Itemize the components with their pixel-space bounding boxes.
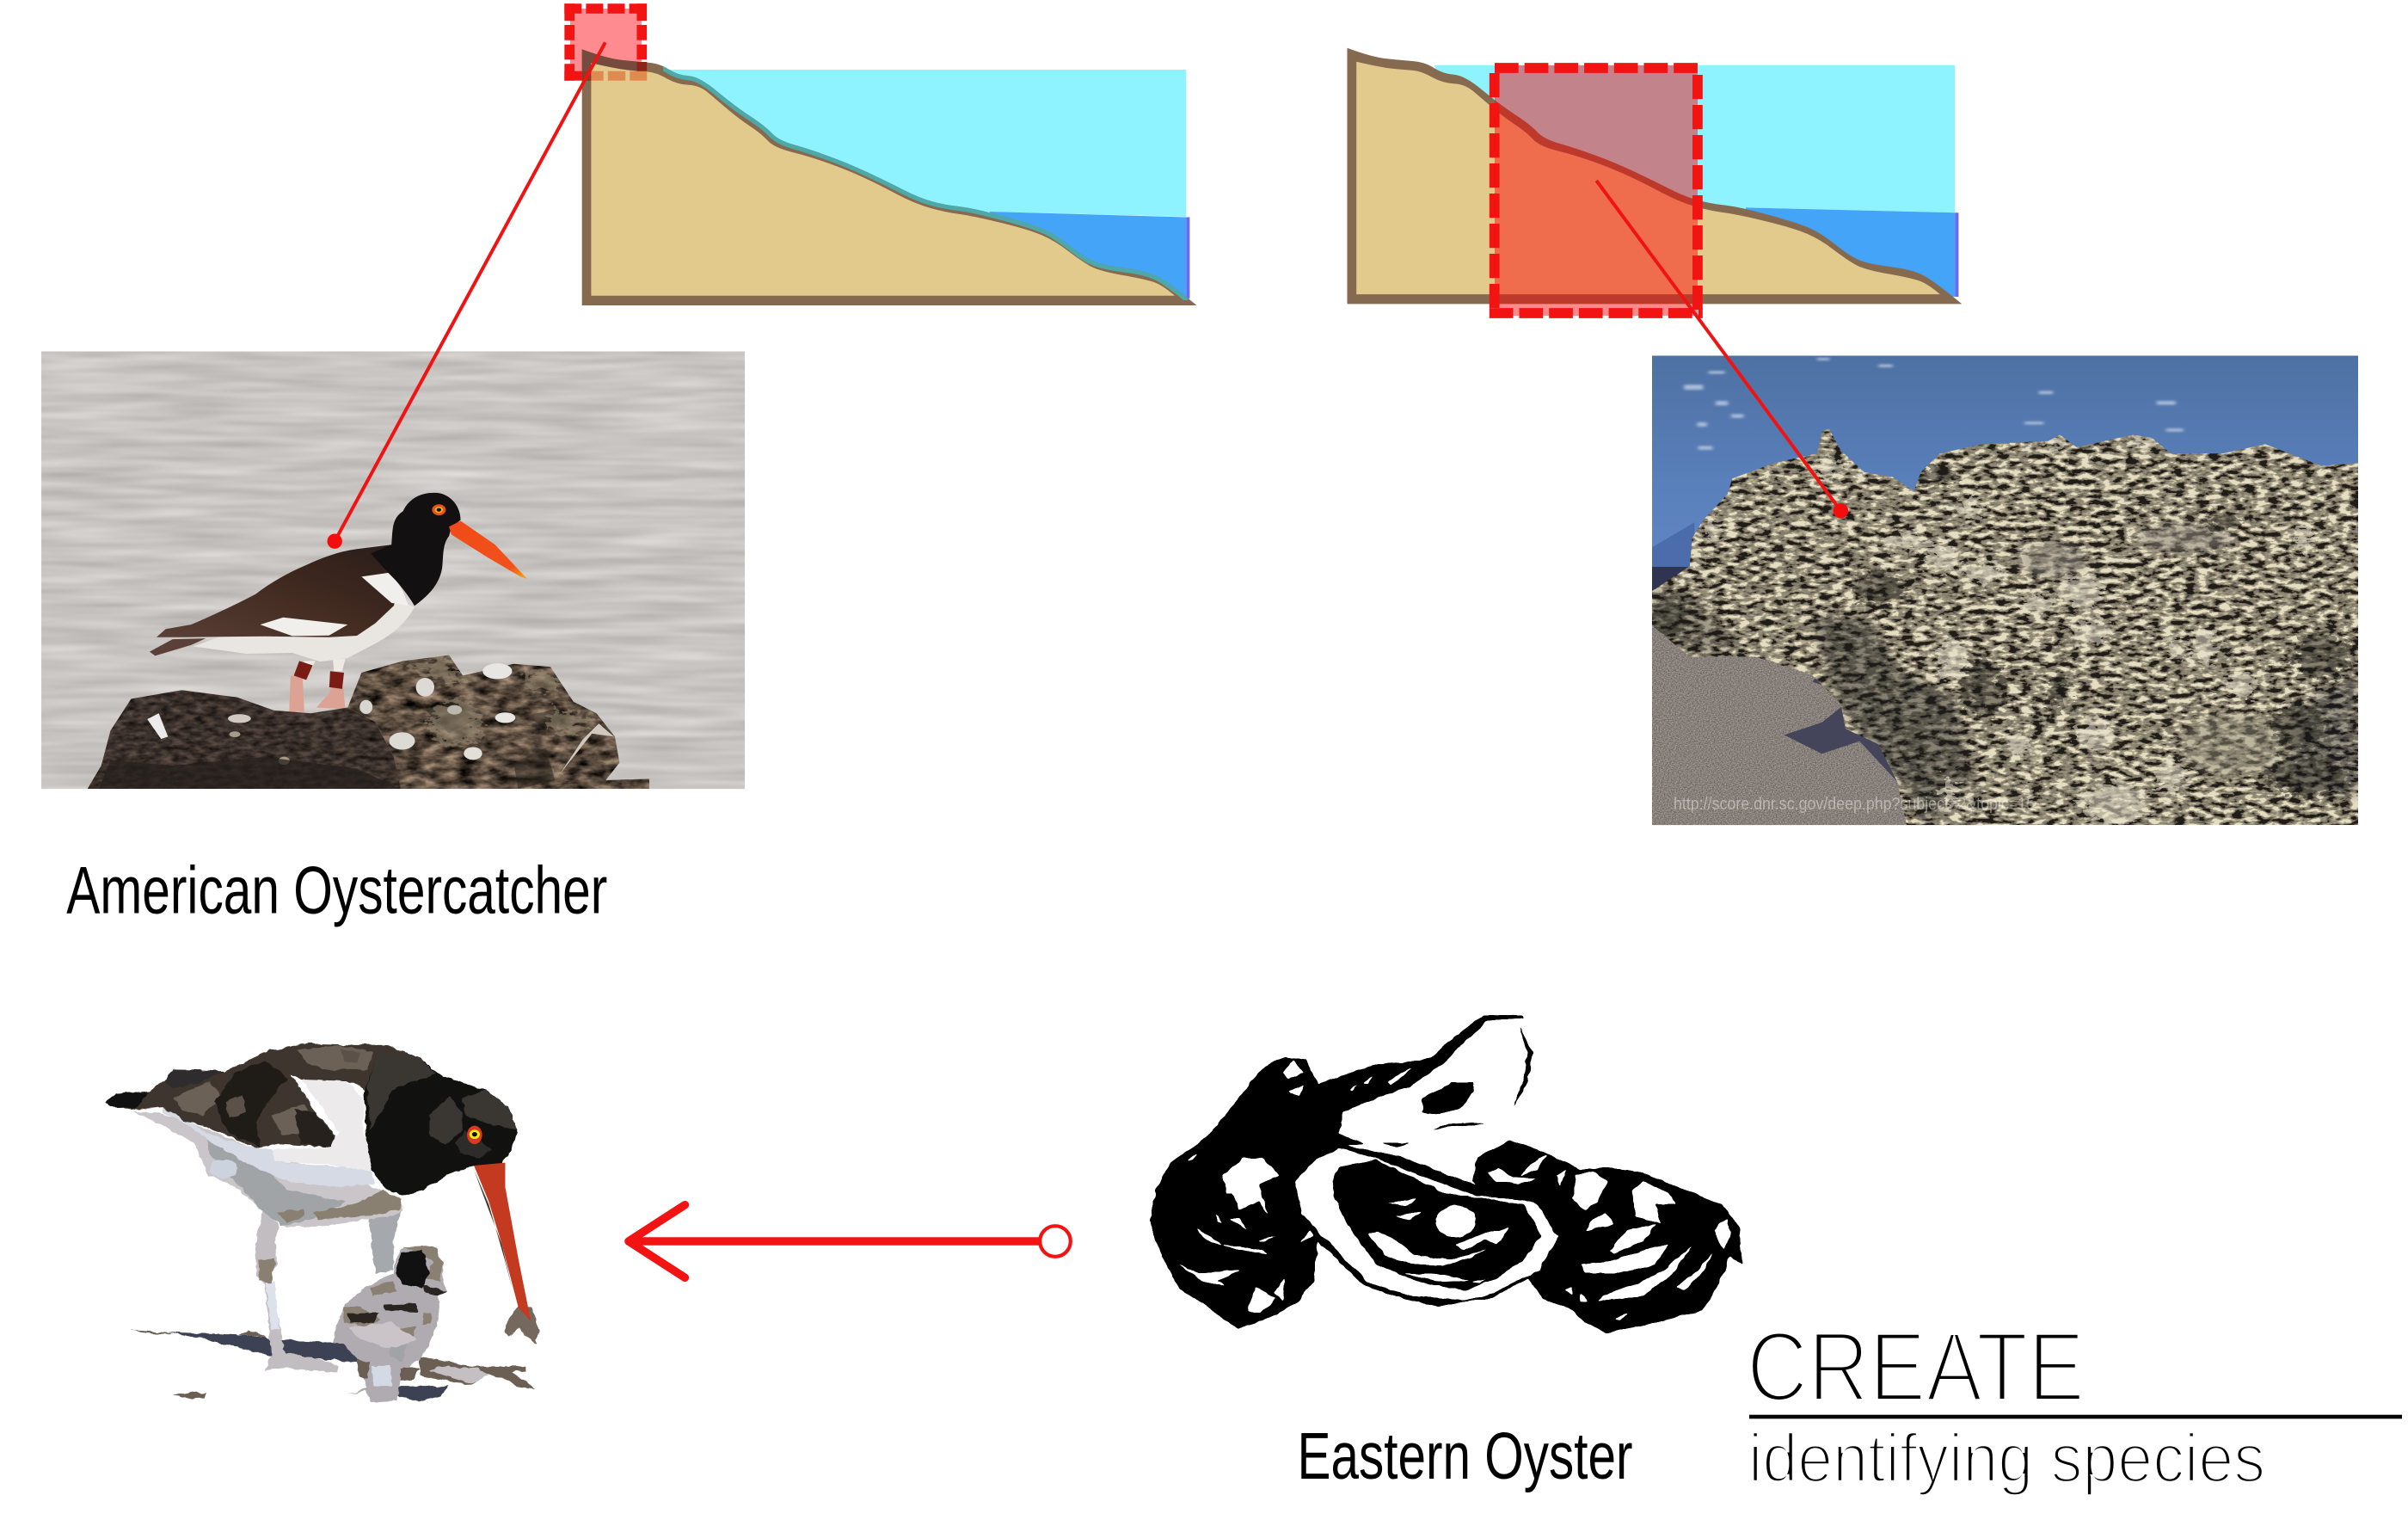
left oyster and upper shell [1149, 1014, 1525, 1327]
oyster reef mass [1652, 428, 2358, 826]
chick [333, 1246, 447, 1402]
bird wing and back [157, 545, 398, 637]
adult legs [255, 1209, 401, 1372]
bird white patches [260, 572, 408, 636]
heading rule [1749, 1415, 2402, 1418]
right oyster [1472, 1140, 1742, 1333]
arrow: oyster feeds oystercatcher [629, 1205, 1071, 1277]
reef shell highlights [1703, 434, 2312, 824]
sand profile [1347, 48, 1962, 304]
adult bill [474, 1163, 531, 1321]
upper shell inner marks [1381, 1023, 1533, 1147]
foreground dark rock [81, 687, 408, 792]
sand profile [564, 49, 1197, 305]
bird white belly [194, 600, 415, 661]
section heading: CREATE: CREATE [1747, 1313, 2085, 1423]
section subheading: identifying species: identifying species [1748, 1420, 2265, 1497]
wet sand edge [1652, 566, 1689, 591]
red leader line to reef photo [1596, 181, 1848, 519]
sea glints [1684, 358, 2184, 450]
bird lower tail [150, 638, 206, 655]
illustration: oystercatcher adult and chick [105, 1043, 540, 1403]
photo: American oystercatcher on oyster rock [41, 351, 745, 790]
photo sea background [1652, 356, 2358, 567]
label: Eastern Oyster: Eastern Oyster [1297, 1419, 1632, 1493]
left beach profile diagram with upper-shore highlight [564, 3, 1197, 305]
ground shadows [130, 1330, 536, 1401]
reef dark crevices [1652, 467, 2352, 796]
water: high tide [1434, 65, 1955, 258]
photo water background [41, 351, 745, 789]
center opened oyster [1291, 1144, 1562, 1307]
water: low tide [990, 212, 1189, 298]
adult underparts [133, 1103, 402, 1228]
water: low tide [1746, 207, 1958, 297]
head and neck highlights [367, 1051, 517, 1159]
bird legs [289, 659, 346, 712]
adult dark back [106, 1043, 436, 1148]
adult black head and neck [364, 1052, 517, 1196]
reef shadow on sand [1784, 678, 1897, 781]
water: high tide [664, 70, 1186, 258]
red leader line to oystercatcher photo [327, 42, 605, 549]
label: American Oystercatcher: American Oystercatcher [66, 854, 607, 928]
highlight box: upper shore [564, 3, 647, 81]
oyster in bill [505, 1306, 538, 1344]
bird head and neck [371, 493, 461, 606]
oyster cluster [343, 652, 656, 792]
photo watermark: http://score.dnr.sc.gov/deep.php?subject=2&topic=15 [1674, 795, 2035, 814]
sand foreground [1652, 619, 1982, 826]
photo: oyster reef at low tide [1651, 356, 2358, 826]
highlight box: oyster reef zone [1490, 65, 1703, 316]
bird beak [449, 521, 527, 579]
illustration: eastern oysters [1150, 1015, 1742, 1333]
adult eye [467, 1126, 482, 1144]
reef fine texture overlay [1652, 428, 2358, 826]
right beach profile diagram with mid-shore highlight [1347, 48, 1962, 316]
adult white shoulder patch [272, 1080, 372, 1172]
bird eye [432, 504, 445, 515]
